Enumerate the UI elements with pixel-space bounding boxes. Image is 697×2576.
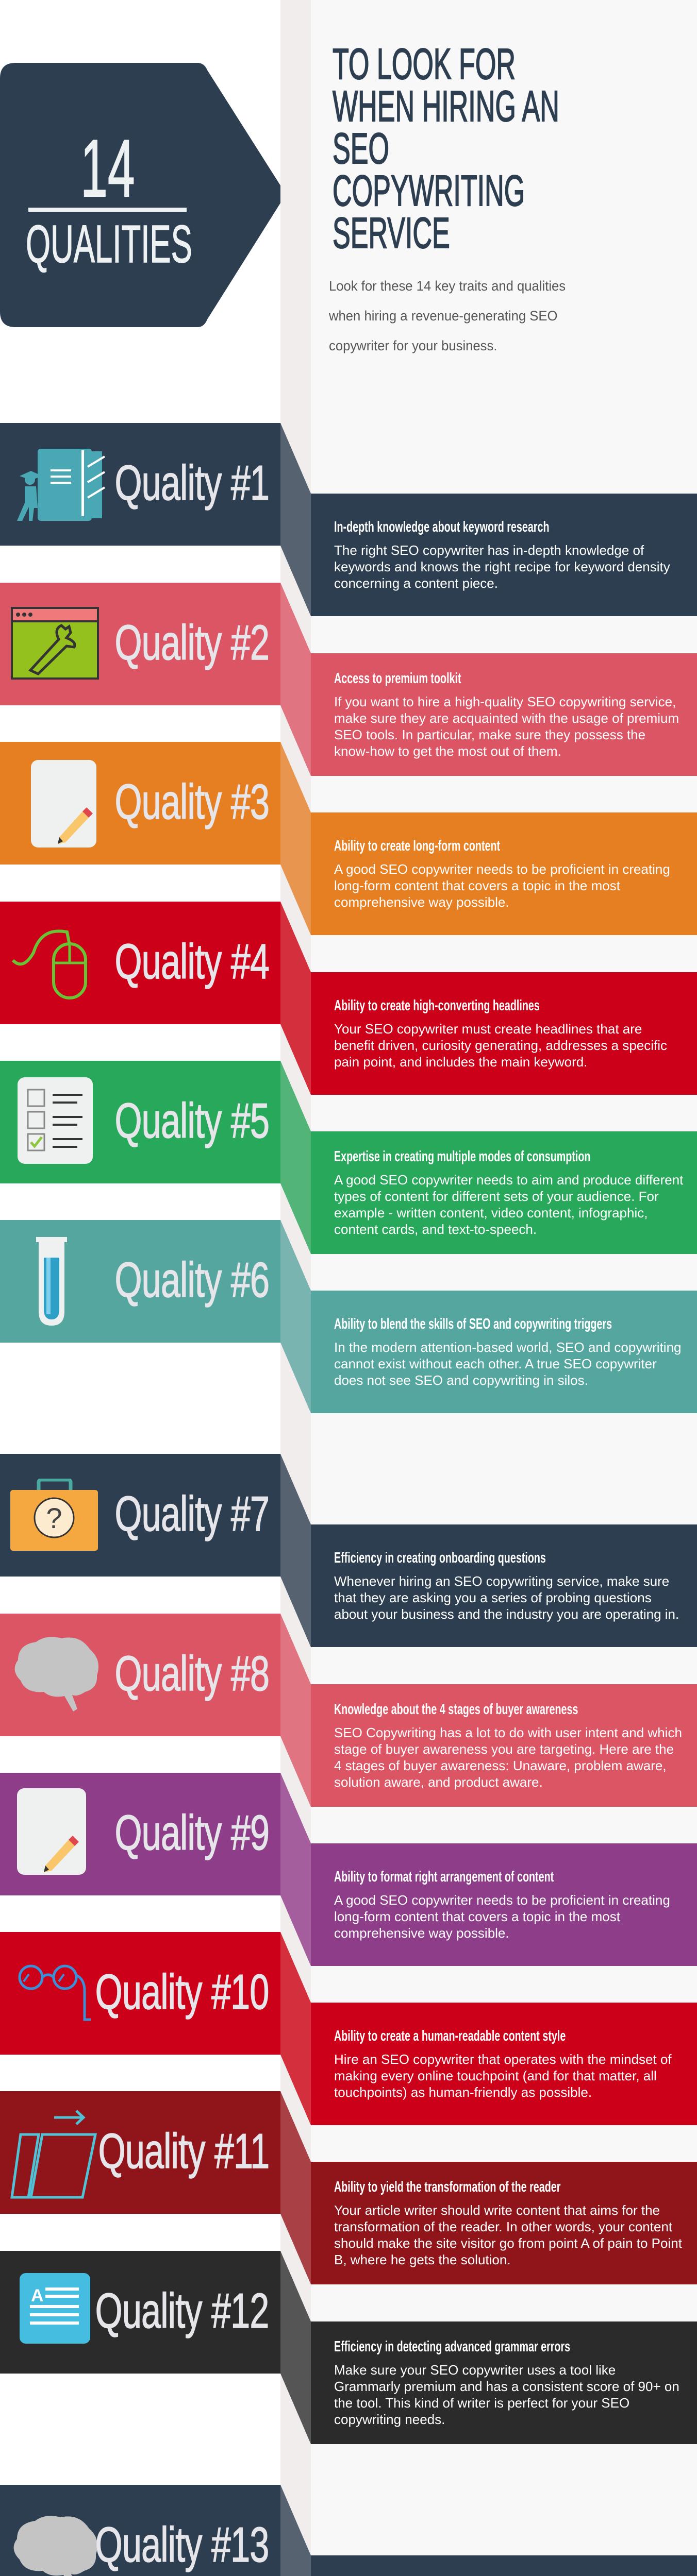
quality 4 block (0, 902, 280, 1024)
badge underline (28, 208, 187, 212)
quality 5 block (0, 1061, 280, 1183)
label: Quality #10 (95, 1964, 269, 2020)
text box 9: A good SEO copywriter needs to be proficient in creating long-form content that covers a topic in the most comprehensive way possible. (334, 1892, 670, 1941)
icon: note with pencil (31, 760, 96, 848)
quality 2 block (0, 583, 280, 705)
quality 13 block (0, 2485, 280, 2576)
text box 7: Whenever hiring an SEO copywriting service, make sure that they are asking you a series of probing questions about your business and the industry you are operating in. (334, 1573, 679, 1622)
badge number: 14 (80, 123, 135, 214)
quality 12 block (0, 2251, 280, 2374)
text box 4: Ability to create high-converting headlines (334, 997, 540, 1014)
badge label: QUALITIES (26, 214, 192, 274)
quality 9 block (0, 1773, 280, 1895)
icon: browser with wrench (11, 607, 99, 680)
label: Quality #2 (114, 615, 269, 670)
subtitle: copywriter for your business. (329, 338, 497, 353)
title: SEO (333, 124, 389, 173)
text box 3: Ability to create long-form content (334, 838, 500, 854)
text box 9 (311, 1843, 697, 1966)
text box 2: Access to premium toolkit (334, 670, 461, 687)
label: Quality #3 (114, 774, 269, 829)
quality 1 block (0, 423, 280, 546)
text box 6: In the modern attention-based world, SEO and copywriting cannot exist without each other. A true SEO copywriter does not see SEO and copywriting in silos. (334, 1340, 682, 1388)
text box 11 (311, 2162, 697, 2284)
connector 6 (280, 1220, 311, 1413)
quality 6 block (0, 1220, 280, 1343)
text box 9: Ability to format right arrangement of content (334, 1869, 554, 1885)
connector 3 (280, 742, 311, 935)
icon: document (20, 2273, 90, 2344)
icon: document: A (31, 2286, 44, 2306)
label: Quality #8 (114, 1646, 269, 1701)
text box 3 (311, 812, 697, 935)
icon: checklist (18, 1077, 93, 1164)
connector 1 (280, 423, 311, 616)
label: Quality #5 (114, 1093, 269, 1148)
title: SERVICE (333, 209, 450, 257)
icon: book and student (17, 449, 105, 521)
label: Quality #6 (114, 1252, 269, 1308)
text box 8: Knowledge about the 4 stages of buyer awareness (334, 1701, 578, 1718)
text box 1: In-depth knowledge about keyword research (334, 519, 549, 535)
text box 11: Ability to yield the transformation of the reader (334, 2179, 560, 2195)
connector 7 (280, 1454, 311, 1647)
title (332, 40, 559, 257)
text box 2: If you want to hire a high-quality SEO copywriting service, make sure they are acquainted with the usage of premium SEO tools. In particular, make sure they possess the know-how to get the most out of them. (334, 694, 679, 759)
text box 10: Ability to create a human-readable content style (334, 2028, 566, 2044)
text box 4: Your SEO copywriter must create headlines that are benefit driven, curiosity generating, addresses a specific pain point, and includes the main keyword. (334, 1021, 667, 1070)
text box 4 (311, 972, 697, 1095)
icon: test tube (36, 1237, 67, 1326)
text box 2 (311, 653, 697, 776)
icon: note with pencil (17, 1788, 86, 1875)
background: center strip (280, 0, 311, 2576)
icon: brain (14, 1637, 98, 1711)
icon: brain (13, 2516, 97, 2576)
label: Quality #13 (95, 2517, 269, 2572)
text box 13 (311, 2555, 697, 2576)
text box 6: Ability to blend the skills of SEO and copywriting triggers (334, 1316, 612, 1332)
text box 12: Efficiency in detecting advanced grammar errors (334, 2338, 570, 2355)
icon: briefcase question: ? (46, 1502, 62, 1534)
connector 5 (280, 1061, 311, 1254)
hero badge: 14 qualities (0, 63, 280, 327)
quality 7 block (0, 1454, 280, 1577)
text box 5 (311, 1131, 697, 1254)
icon: mouse (11, 929, 87, 999)
connector 12 (280, 2251, 311, 2444)
text box 5: Expertise in creating multiple modes of consumption (334, 1148, 590, 1165)
subtitle (329, 278, 566, 353)
label: Quality #1 (114, 455, 269, 511)
label: Quality #7 (114, 1486, 269, 1541)
text box 12: Make sure your SEO copywriter uses a tool like Grammarly premium and has a consistent score of 90+ on the tool. This kind of writer is perfect for your SEO copywriting needs. (334, 2362, 679, 2427)
connector 11 (280, 2091, 311, 2284)
label: Quality #4 (114, 934, 269, 989)
connector 10 (280, 1932, 311, 2125)
connector 2 (280, 583, 311, 776)
title: TO LOOK FOR (333, 40, 516, 88)
text box 6 (311, 1291, 697, 1413)
text box 12 (311, 2321, 697, 2444)
subtitle: when hiring a revenue-generating SEO (329, 308, 557, 324)
icon: briefcase question (10, 1479, 98, 1551)
text box 7 (311, 1524, 697, 1647)
title: COPYWRITING (333, 166, 525, 215)
text box 1 (311, 494, 697, 616)
text box 10: Hire an SEO copywriter that operates with the mindset of making every online touchpoint (and for that matter, all touchpoints) as human-friendly as possible. (334, 2052, 672, 2100)
text box 11: Your article writer should write content that aims for the transformation of the reader. In other words, your content should make the site visitor go from point A of pain to Point B, where he gets the solution. (334, 2202, 682, 2267)
subtitle: Look for these 14 key traits and qualities (329, 278, 566, 294)
text box 8: SEO Copywriting has a lot to do with user intent and which stage of buyer awareness you are targeting. Here are the 4 stages of buyer awareness: Unaware, problem aware, solution aware, and product aware. (334, 1725, 682, 1790)
text box 3: A good SEO copywriter needs to be proficient in creating long-form content that covers a topic in the most comprehensive way possible. (334, 861, 670, 910)
text box 7: Efficiency in creating onboarding questions (334, 1550, 546, 1566)
text box 5: A good SEO copywriter needs to aim and produce different types of content for different sets of your audience. For example - written content, video content, infographic, content cards, and text-to-speech. (334, 1172, 683, 1237)
connector 9 (280, 1773, 311, 1966)
quality 8 block (0, 1614, 280, 1736)
connector 13 (280, 2485, 311, 2576)
text box 8 (311, 1684, 697, 1807)
text box 10 (311, 2003, 697, 2125)
text box 1: The right SEO copywriter has in-depth knowledge of keywords and knows the right recipe for keyword density concerning a content piece. (334, 543, 670, 591)
quality 11 block (0, 2091, 280, 2214)
title: WHEN HIRING AN (333, 82, 559, 130)
connector 4 (280, 902, 311, 1095)
label: Quality #12 (95, 2283, 269, 2338)
quality 3 block (0, 742, 280, 865)
icon: transformation shapes (10, 2110, 97, 2199)
label: Quality #9 (114, 1805, 269, 1860)
icon: glasses (19, 1965, 91, 2021)
connector 8 (280, 1614, 311, 1807)
label: Quality #11 (98, 2124, 269, 2179)
quality 10 block (0, 1932, 280, 2055)
background: right panel (311, 0, 697, 2576)
